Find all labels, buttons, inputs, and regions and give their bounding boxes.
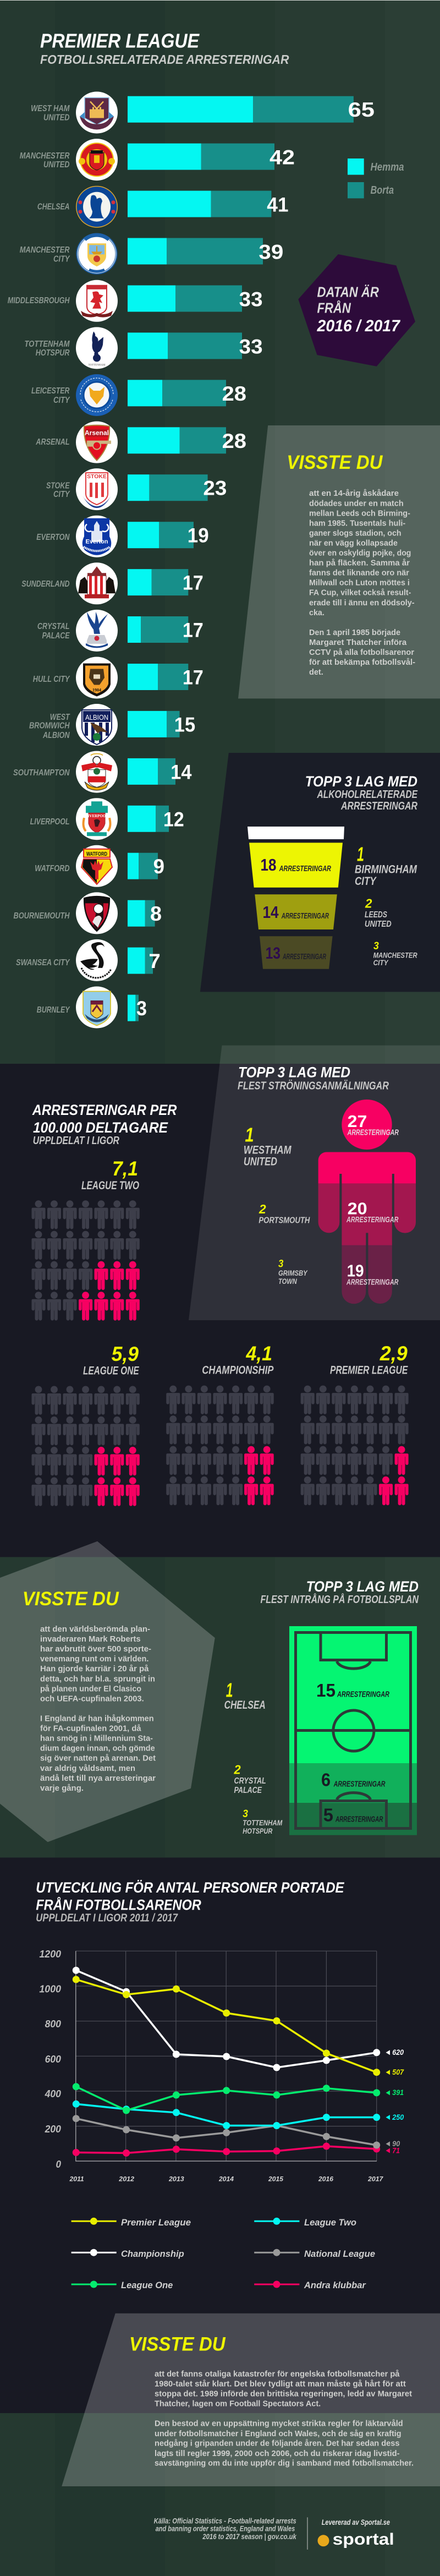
footer: source: and banning order statistics, England and Wales [156, 2524, 295, 2533]
series: League Two: 250 [392, 2113, 404, 2121]
panel: top 3 alcohol related arrests [200, 753, 440, 992]
bar: West Bromwich Albion: ALBION [85, 713, 108, 721]
pictogram: Championship: 4,1 [245, 1342, 272, 1365]
panel: did you know 1: när en vägg kollapsade [309, 539, 398, 548]
panel: top 3 most disorder reports: TOPP 3 LAG MED [238, 1064, 350, 1081]
heading: arrests per 100 000: ARRESTERINGAR PER [32, 1102, 177, 1118]
chart: football pitch: 5 [323, 1804, 333, 1825]
ranking: top disorder clubs: GRIMSBY [278, 1268, 308, 1277]
bar: Burnley: 3 [136, 997, 147, 1020]
heading: most pitch invasions: TOPP 3 LAG MED [306, 1578, 419, 1595]
panel: did you know 2: att den världsberömda plan- [40, 1625, 150, 1634]
bar: Bournemouth: BOURNEMOUTH [13, 911, 70, 921]
heading: banned persons trend: UTVECKLING FÖR ANTAL PERSONER PORTADE [36, 1879, 344, 1896]
bar: Southampton: 14 [170, 761, 192, 783]
panel: did you know 2: var aldrig våldsamt, men [40, 1764, 135, 1773]
pictogram: Championship [166, 1342, 274, 1505]
bar: Tottenham Hotspur [24, 327, 263, 369]
bar: Manchester United: MANCHESTER [20, 151, 70, 161]
chart: beer glass: ARRESTERINGAR [282, 952, 326, 961]
icon: large person chart [318, 1100, 416, 1304]
chart axis labels: 800 [45, 2019, 61, 2030]
bar: Middlesbrough: MIDDLESBROUGH [8, 296, 70, 305]
panel: did you know 1: för att bekämpa fotbollsvål- [309, 658, 415, 667]
bar: Bournemouth [13, 892, 162, 934]
panel: did you know 1: fanns det liknande oro när [309, 569, 409, 578]
ranking: top disorder clubs: PORTSMOUTH [258, 1216, 310, 1225]
chart axis labels: 2016 [318, 2175, 333, 2183]
pictogram: Championship: CHAMPIONSHIP [202, 1364, 274, 1377]
pictogram: League Two: LEAGUE TWO [81, 1179, 139, 1192]
chart axis labels: 2015 [268, 2175, 283, 2183]
ranking: top alcohol clubs: 3 [373, 940, 379, 952]
heading: most pitch invasions [261, 1578, 419, 1606]
bar: Chelsea: 41 [267, 194, 288, 216]
panel: did you know 2 [0, 1541, 215, 1842]
panel: did you know 1: han på fläcken. Samma år [309, 559, 410, 568]
bar: Tottenham Hotspur: TOTTENHAM [88, 364, 106, 367]
panel: did you know 2: han smög in i Millennium Sta- [40, 1735, 153, 1743]
panel: did you know 2: dium dagen innan, och gömde [40, 1744, 155, 1753]
bar: Leicester City [31, 374, 246, 416]
bar: Manchester City [20, 233, 283, 275]
bar: Sunderland [21, 562, 204, 604]
chart axis labels: 2014 [218, 2175, 234, 2183]
legend: home and away [348, 158, 404, 198]
panel: did you know 1: att en 14-årig åskådare [309, 489, 399, 498]
panel: did you know 3: savstängning om du inte uppför dig i samband med fotbollsmatcher. [155, 2459, 414, 2468]
bar: Middlesbrough: 33 [239, 288, 263, 310]
bar: Hull City: 1904 [92, 688, 101, 692]
bar: Arsenal: 28 [222, 430, 246, 452]
bar: Hull City: 17 [183, 666, 204, 689]
chart axis labels: 2011 [69, 2175, 84, 2183]
panel: did you know 1: mellan Leeds och Birming- [309, 509, 410, 518]
ranking: top alcohol clubs: MANCHESTER [373, 950, 417, 959]
bar: Arsenal: Arsenal [85, 429, 109, 437]
bar: Tottenham Hotspur: TOTTENHAM [24, 340, 70, 349]
panel: did you know 3: att det fanns otaliga katastrofer för engelska fotbollsmatcher på [155, 2370, 400, 2378]
bar: Leicester City: CITY [53, 396, 70, 405]
values on person: ARRESTERINGAR [346, 1277, 399, 1287]
bar: Manchester City: 39 [258, 241, 283, 263]
panel: top 3 most disorder reports [189, 1046, 440, 1320]
panel: did you know 1: VISSTE DU [287, 452, 383, 473]
series: Premier League: 507 [392, 2068, 404, 2076]
ranking: pitch invasion clubs: CHELSEA [224, 1699, 266, 1711]
bar: Manchester City: CITY [53, 254, 70, 264]
panel: did you know 2: sig över natten på arenan. Det [40, 1754, 156, 1763]
panel: did you know 1: över en oskyldig pojke, dog [309, 549, 411, 558]
panel: top 3 most disorder reports: FLEST STRÖNINGSANMÄLNINGAR [238, 1080, 389, 1092]
ranking: top disorder clubs: TOWN [278, 1277, 298, 1286]
bar: West Ham United: WEST HAM [31, 104, 70, 113]
ranking: top disorder clubs: 2 [258, 1202, 266, 1216]
ranking: top alcohol clubs: 2 [365, 896, 372, 910]
series: League One: 391 [392, 2088, 404, 2097]
bar: Crystal Palace [37, 610, 204, 652]
chart: beer glass: 18 [261, 855, 276, 874]
bar: Everton: Everton [86, 539, 108, 545]
panel: did you know 2: Han gjorde karriär i 20 år på [40, 1665, 149, 1673]
panel: did you know 3: lagts till regler 1999, 2000 och 2006, och du riskerar idag livstid- [155, 2449, 400, 2458]
footer: source: 2016 to 2017 season | gov.co.uk [202, 2532, 297, 2541]
bar: Hull City: HULL CITY [33, 675, 70, 684]
bar: West Ham United: UNITED [43, 113, 70, 122]
ranking: pitch invasion clubs: 1 [226, 1679, 233, 1702]
bar: Sunderland: 17 [183, 572, 204, 594]
ranking: top alcohol clubs [355, 843, 417, 967]
panel: did you know 2: invaderaren Mark Roberts [40, 1635, 141, 1644]
bar: West Ham United: 65 [348, 99, 375, 121]
ranking: top alcohol clubs: BIRMINGHAM [355, 863, 417, 876]
pictogram: Premier League: 2,9 [380, 1342, 408, 1365]
pictogram: Premier League [301, 1342, 409, 1505]
panel: did you know 3: under fotbollsmatcher i England och Wales, och de såg en kraftig [155, 2430, 402, 2438]
legend: home and away: Borta [371, 184, 394, 196]
ranking: top alcohol clubs: LEEDS [365, 910, 387, 920]
bar: Stoke City: 23 [203, 477, 227, 500]
bar: Everton: EVERTON [36, 533, 70, 542]
bar: West Ham United [31, 91, 375, 133]
panel: did you know 3 [62, 2314, 440, 2486]
chart legend [72, 2217, 375, 2290]
panel: did you know 2: I England är han ihågkommen [40, 1715, 154, 1724]
pictogram: Premier League: PREMIER LEAGUE [330, 1364, 408, 1377]
title [40, 30, 289, 67]
panel: did you know 1: CCTV på alla fotbollsarenor [309, 648, 414, 657]
panel: did you know 1: det. [309, 668, 323, 677]
bar: Everton: 19 [188, 524, 209, 547]
bar: Manchester United: UNITED [43, 160, 70, 169]
values on person: 27 [348, 1112, 367, 1131]
ranking: top alcohol clubs: UNITED [365, 920, 392, 929]
series: National League [73, 2115, 400, 2148]
pictogram: League One [32, 1343, 140, 1506]
bar: Manchester United [20, 139, 295, 181]
values on person: 19 [347, 1261, 364, 1281]
footer: source: Källa: Official Statistics - Football-related arrests [154, 2517, 296, 2525]
bar: Crystal Palace: PALACE [42, 631, 70, 641]
bar: Swansea City: SWANSEA CITY [16, 958, 70, 967]
bar: Leicester City: LEICESTER [31, 386, 70, 396]
pictogram: League One: LEAGUE ONE [83, 1365, 139, 1377]
bar: Crystal Palace: 17 [183, 619, 204, 642]
heading: banned persons trend: UPPLDELAT I LIGOR 2011 / 2017 [36, 1912, 178, 1924]
bar: Burnley: BURNLEY [37, 1005, 70, 1015]
ranking: top alcohol clubs: CITY [355, 875, 377, 888]
bar: Watford: 9 [153, 855, 164, 878]
footer: Sportal logo [318, 2518, 394, 2548]
bar: West Bromwich Albion [29, 704, 195, 746]
bar: Arsenal [36, 422, 246, 463]
series: Championship [73, 1967, 404, 2071]
ranking: top disorder clubs: 3 [278, 1258, 284, 1270]
series: Andra klubbar: 71 [392, 2146, 400, 2154]
panel: did you know 2: venemang runt om i världen. [40, 1655, 148, 1664]
panel: did you know 3: 1980-talet står klart. Det blev tydligt att man måste gå hårt för att [155, 2380, 406, 2388]
callout: data season: DATAN ÄR [317, 284, 379, 300]
bar: Southampton [13, 751, 192, 793]
bar: Stoke City: STOKE [87, 473, 107, 480]
bar: Watford: WATFORD [86, 851, 107, 857]
panel: did you know 2: varje gång. [40, 1784, 84, 1793]
panel: did you know 3: VISSTE DU [129, 2333, 226, 2355]
footer: Sportal logo: sportal [333, 2530, 394, 2548]
panel: did you know 1: FA Cup, vilket också result- [309, 589, 411, 598]
bar: Crystal Palace: CRYSTAL [37, 622, 69, 631]
chart: football pitch: ARRESTERINGAR [335, 1815, 383, 1824]
chart axis labels: 2017 [367, 2175, 384, 2183]
bar: Stoke City: CITY [53, 490, 70, 499]
chart axis labels: 400 [45, 2088, 61, 2099]
bar: Swansea City [16, 939, 161, 981]
bar: Southampton: SOUTHAMPTON [13, 768, 70, 778]
chart: football pitch: 15 [316, 1680, 336, 1700]
series: Championship: 620 [392, 2048, 404, 2057]
ranking: top disorder clubs: WESTHAM [244, 1144, 292, 1157]
callout: data season: 2016 / 2017 [317, 317, 400, 335]
bar: Chelsea: CHELSEA [37, 202, 69, 211]
heading: arrests per 100 000: 100.000 DELTAGARE [33, 1119, 168, 1136]
chart: beer glass: 13 [266, 944, 280, 962]
bar: Hull City [33, 657, 204, 699]
bar: Liverpool: 12 [163, 808, 184, 830]
chart: beer glass: 14 [263, 903, 279, 922]
chart: football pitch: 6 [321, 1770, 331, 1790]
bar: Swansea City: 7 [148, 950, 161, 972]
bar: West Bromwich Albion: ALBION [42, 731, 70, 740]
panel: did you know 1: Den 1 april 1985 började [309, 628, 400, 637]
legend: home and away: Hemma [371, 161, 404, 173]
pictogram: League Two [32, 1157, 140, 1321]
panel: did you know 1: Millwall och Luton möttes i [309, 579, 410, 588]
series: Andra klubbar [73, 2143, 400, 2157]
bar: West Bromwich Albion: 15 [174, 713, 195, 736]
bar: Everton [36, 516, 209, 557]
ranking: pitch invasion clubs [224, 1679, 283, 1835]
bar: Watford [35, 845, 164, 887]
chart axis labels: 2013 [168, 2175, 184, 2183]
chart: beer glass [248, 827, 344, 969]
chart legend: Andra klubbar [304, 2280, 366, 2290]
series: League Two [73, 2101, 404, 2129]
series: National League: 90 [392, 2139, 400, 2148]
chart axis labels: 200 [45, 2124, 61, 2135]
ranking: top alcohol clubs: CITY [373, 958, 389, 967]
chart axis labels: 1200 [39, 1949, 61, 1960]
title: PREMIER LEAGUE [40, 30, 200, 52]
panel: did you know 1: ganer slogs stadion, och [309, 529, 402, 538]
bar: Stoke City: STOKE [46, 481, 70, 490]
pictogram: League One: 5,9 [112, 1343, 139, 1365]
bar: West Bromwich Albion: WEST [50, 713, 70, 722]
bar: Manchester United: 42 [270, 146, 295, 169]
panel: did you know 1: dödades under en match [309, 499, 404, 508]
ranking: pitch invasion clubs: PALACE [234, 1786, 262, 1795]
ranking: pitch invasion clubs: HOTSPUR [243, 1826, 273, 1835]
chart axis labels: 2012 [118, 2175, 134, 2183]
panel: did you know 1: Margaret Thatcher införa [309, 638, 407, 647]
ranking: pitch invasion clubs: 2 [234, 1763, 241, 1777]
panel: did you know 2: ändå lett till nya arresteringar [40, 1774, 156, 1783]
bar: Bournemouth: 8 [150, 903, 162, 925]
panel: did you know 1: erade till i ännu en dödsoly- [309, 599, 415, 608]
title: FOTBOLLSRELATERADE ARRESTERINGAR [40, 52, 289, 67]
panel: did you know 3: Den bestod av en uppsättning mycket strikta regler för läktarvåld [155, 2420, 403, 2429]
chart legend: Premier League [121, 2217, 191, 2228]
bar: Sunderland: SUNDERLAND [21, 579, 70, 589]
chart: beer glass: ARRESTERINGAR [279, 864, 331, 873]
bar: Watford: WATFORD [35, 864, 70, 873]
panel: did you know 2: på planen under El Clasico [40, 1684, 141, 1693]
panel: did you know 2: för FA-cupfinalen 2001, då [40, 1725, 142, 1733]
bar chart: arrests per club [8, 91, 375, 1028]
values on person [346, 1112, 399, 1287]
chart axis labels: 0 [56, 2159, 61, 2170]
chart: football pitch [289, 1626, 417, 1835]
heading: banned persons trend: FRÅN FOTBOLLSARENOR [36, 1896, 201, 1913]
footer: Sportal logo: Levererad av Sportal.se [322, 2518, 390, 2526]
panel: did you know 2: detta, och har bl.a. sprungit in [40, 1675, 155, 1683]
panel: did you know 3: Thatcher, lagen om Football Spectators Act. [155, 2400, 321, 2409]
pictogram: League Two: 7,1 [112, 1157, 138, 1180]
panel: did you know 3: stoppa det. 1989 införde den brittiska regeringen, ledd av Margaret [155, 2389, 412, 2398]
panel: did you know 2: VISSTE DU [23, 1588, 119, 1610]
chart axis labels [39, 1949, 384, 2183]
series: League One [73, 2083, 404, 2114]
ranking: pitch invasion clubs: 3 [243, 1808, 248, 1820]
chart legend: League One [121, 2280, 173, 2290]
ranking: pitch invasion clubs: TOTTENHAM [243, 1818, 283, 1827]
bar: Burnley [37, 986, 147, 1028]
bar: Manchester City: MANCHESTER [20, 245, 70, 255]
values on person: ARRESTERINGAR [346, 1215, 399, 1224]
ranking: top disorder clubs: UNITED [244, 1156, 277, 1168]
chart: football pitch: ARRESTERINGAR [337, 1690, 389, 1699]
heading: banned persons trend [36, 1879, 344, 1924]
panel: did you know 1: cka. [309, 609, 324, 617]
panel: did you know 2: och UEFA-cupfinalen 2003. [40, 1694, 144, 1703]
bar: Leicester City: 28 [222, 382, 246, 405]
ranking: top alcohol clubs: 1 [357, 843, 364, 865]
panel: did you know 2: har avbrutit över 500 sporte- [40, 1645, 151, 1654]
series: Premier League [73, 1976, 404, 2076]
bar: Stoke City [46, 468, 227, 510]
chart legend: National League [304, 2249, 375, 2259]
line chart: banning orders per league [39, 1949, 404, 2183]
chart: football pitch: ARRESTERINGAR [333, 1780, 386, 1789]
values on person: ARRESTERINGAR [347, 1128, 399, 1137]
footer: source [154, 2517, 308, 2550]
panel: top 3 alcohol related arrests: ARRESTERINGAR [340, 800, 417, 812]
callout: data season: FRÅN [317, 300, 351, 316]
bar: Liverpool: LIVERPOOL [30, 817, 69, 827]
bar: Arsenal: ARSENAL [36, 437, 69, 447]
ranking: top disorder clubs: 1 [245, 1123, 254, 1146]
heading: arrests per 100 000 [32, 1102, 177, 1147]
bar: Chelsea [37, 186, 289, 228]
heading: arrests per 100 000: UPPLDELAT I LIGOR [33, 1135, 119, 1147]
bar: Liverpool: LIVERPOOL [85, 814, 108, 818]
bar: West Bromwich Albion: BROMWICH [29, 721, 70, 731]
bar: Tottenham Hotspur: HOTSPUR [36, 348, 70, 358]
chart axis labels: 1000 [39, 1983, 61, 1994]
panel: top 3 alcohol related arrests: TOPP 3 LAG MED [305, 773, 417, 790]
bar: Middlesbrough [8, 280, 263, 322]
callout: data season [298, 254, 415, 367]
values on person: 20 [348, 1199, 367, 1218]
bar: Tottenham Hotspur: 33 [239, 335, 263, 358]
bar: Liverpool [30, 798, 184, 840]
chart legend: Championship [121, 2249, 184, 2259]
ranking: pitch invasion clubs: CRYSTAL [234, 1776, 266, 1786]
panel: did you know 1 [238, 425, 440, 698]
panel: did you know 3: nedgång i gripanden under de följande åren. Det har sedan dess [155, 2440, 399, 2448]
chart legend: League Two [304, 2217, 356, 2228]
ranking: top disorder clubs [244, 1123, 310, 1286]
chart axis labels: 600 [45, 2054, 61, 2065]
panel: did you know 1: ham 1985. Tusentals huli- [309, 519, 405, 528]
chart: beer glass: ARRESTERINGAR [281, 911, 329, 921]
